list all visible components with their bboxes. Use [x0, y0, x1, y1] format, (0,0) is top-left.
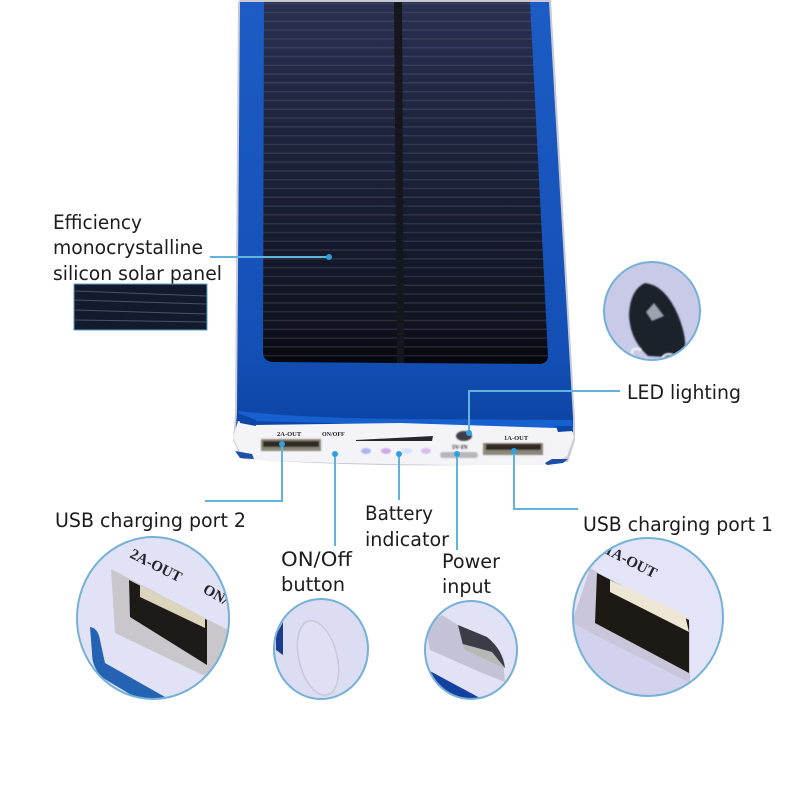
LEDs	[361, 448, 431, 454]
callout line: battery indicator	[396, 451, 402, 500]
ON/Off button label	[281, 548, 353, 596]
detail circle: USB port 1	[572, 537, 724, 697]
port label 1A-OUT: 1A-OUT	[504, 435, 529, 442]
detail circle: USB port 2: 2A-OUT	[127, 546, 184, 586]
callout line: solar panel	[210, 254, 332, 260]
white front face	[233, 421, 574, 465]
front corner accents	[240, 414, 256, 426]
USB charging port 1 label: USB charging port 1	[583, 513, 773, 536]
ON/Off button label: button	[281, 573, 345, 596]
detail circle: USB port 2: ON/	[200, 582, 232, 609]
solar cell swatch	[74, 284, 207, 330]
solar panel label	[53, 211, 222, 285]
USB port 1	[483, 443, 543, 455]
solar panel label: Efficiency	[53, 211, 142, 234]
Power input label	[442, 550, 501, 598]
Battery indicator label	[365, 502, 450, 551]
USB charging port 2 label: USB charging port 2	[55, 509, 246, 532]
ON/Off button label: ON/Off	[281, 548, 353, 571]
callout line: ON/Off button	[332, 451, 338, 546]
Power input label: Power	[442, 550, 501, 573]
Battery indicator label: Battery	[365, 502, 433, 525]
callout line: USB port 1	[511, 448, 578, 509]
detail circle: USB port 2	[76, 536, 230, 700]
power input socket	[440, 452, 478, 458]
LED lamp	[452, 431, 472, 451]
LED lighting label: LED lighting	[627, 381, 741, 404]
battery meter wedge	[356, 436, 433, 441]
power bank device	[233, 0, 575, 465]
label ON/OFF: ON/OFF	[322, 432, 345, 438]
detail circle: power input	[424, 600, 518, 700]
detail circle: LED lamp: & cc	[626, 343, 692, 378]
LED lamp: 5V-IN	[452, 445, 468, 451]
solar panel on device	[263, 2, 548, 364]
callout line: power input	[454, 451, 460, 550]
callout line: LED lighting	[466, 391, 620, 436]
blue rim highlight	[238, 411, 573, 431]
detail circle: ON/Off button	[273, 598, 369, 700]
callout line: USB port 2	[205, 441, 285, 501]
Battery indicator label: indicator	[365, 528, 450, 551]
detail circle: USB port 1: 1A-OUT	[602, 542, 659, 582]
Power input label: input	[442, 575, 491, 598]
solar panel label: monocrystalline	[53, 236, 203, 259]
USB port 2	[261, 439, 321, 451]
device body	[233, 0, 575, 465]
detail circle: LED lamp	[603, 261, 701, 361]
solar panel label: silicon solar panel	[53, 262, 222, 285]
port label 2A-OUT: 2A-OUT	[277, 431, 302, 438]
